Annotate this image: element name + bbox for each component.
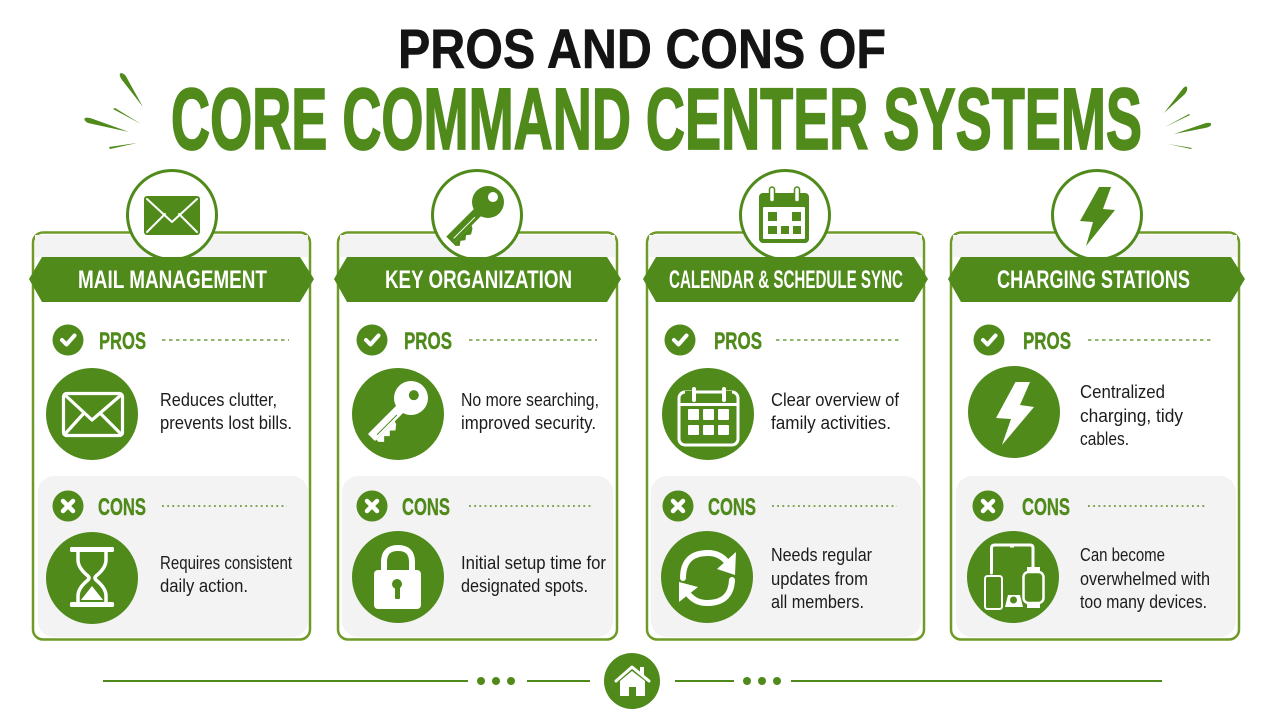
- icon: calendar: [662, 368, 754, 460]
- pros text: [771, 390, 900, 433]
- cons text: Can become: [1080, 545, 1165, 565]
- cons text: updates from: [771, 569, 868, 589]
- footer divider: [103, 677, 1162, 685]
- card frame: [33, 232, 310, 640]
- cons text: Requires consistent: [160, 553, 292, 573]
- cons text: designated spots.: [461, 576, 588, 596]
- cons header: CONS: [98, 494, 146, 521]
- pros header: PROS: [404, 328, 452, 355]
- pros text: Clear overview of: [771, 390, 900, 410]
- cons text: overwhelmed with: [1080, 569, 1210, 589]
- pros header: [52, 324, 289, 356]
- cons header: [662, 490, 897, 522]
- heading banner: CALENDAR & SCHEDULE SYNC: [669, 266, 903, 294]
- pros header: PROS: [714, 328, 762, 355]
- panel: calendar and schedule sync: [643, 170, 928, 640]
- pros text: improved security.: [461, 413, 596, 433]
- panel: key organization: [334, 170, 621, 640]
- icon: right sparkle rays: [1164, 86, 1211, 149]
- pros header: PROS: [99, 328, 146, 355]
- cons header: [52, 490, 287, 522]
- cons background: [342, 476, 613, 637]
- pros text: prevents lost bills.: [160, 413, 292, 433]
- card frame: [338, 232, 617, 640]
- header badge icon: lightning bolt: [1052, 170, 1142, 260]
- icon: key: [352, 368, 444, 460]
- icon: envelope outline: [46, 368, 138, 460]
- header badge icon: calendar: [740, 170, 830, 260]
- icon: hourglass: [46, 532, 138, 624]
- heading banner: [29, 257, 314, 302]
- pros text: Reduces clutter,: [160, 390, 277, 410]
- cons header: CONS: [708, 494, 756, 521]
- icon: lightning bolt: [968, 366, 1060, 458]
- header badge icon: key: [432, 170, 522, 260]
- cons background: [38, 476, 308, 637]
- cons text: [771, 545, 872, 612]
- pros header: [974, 324, 1214, 356]
- pros header: [664, 324, 902, 356]
- cons text: Initial setup time for: [461, 553, 606, 573]
- cons background: [651, 476, 921, 637]
- heading banner: [334, 257, 621, 302]
- icon: home: [604, 653, 660, 709]
- icon: devices: [967, 531, 1059, 623]
- pros text: cables.: [1080, 429, 1129, 449]
- pros text: [1080, 382, 1183, 449]
- panel: mail management: [29, 170, 314, 640]
- panel: charging stations: [948, 170, 1245, 640]
- icon: sync arrows: [661, 531, 753, 623]
- header badge icon: envelope: [128, 170, 216, 260]
- cons text: all members.: [771, 592, 864, 612]
- title line 1: PROS AND CONS OF: [398, 17, 886, 80]
- cons text: [461, 553, 606, 596]
- cons header: [972, 490, 1206, 522]
- pros text: Centralized: [1080, 382, 1165, 402]
- pros text: family activities.: [771, 413, 891, 433]
- heading banner: MAIL MANAGEMENT: [78, 266, 267, 294]
- cons text: Needs regular: [771, 545, 872, 565]
- pros text: [461, 390, 599, 433]
- pros text: [160, 390, 292, 433]
- pros header: [356, 324, 597, 356]
- cons header: CONS: [1022, 494, 1070, 521]
- card frame: [647, 232, 924, 640]
- heading banner: CHARGING STATIONS: [997, 266, 1190, 294]
- cons text: daily action.: [160, 576, 248, 596]
- pros text: charging, tidy: [1080, 406, 1183, 426]
- cons text: too many devices.: [1080, 592, 1207, 612]
- heading banner: [643, 257, 928, 302]
- heading banner: [948, 257, 1245, 302]
- cons header: [356, 490, 592, 522]
- icon: padlock: [352, 531, 444, 623]
- icon: left sparkle rays: [84, 73, 143, 149]
- cons text: [160, 553, 292, 596]
- pros text: No more searching,: [461, 390, 599, 410]
- cons header: CONS: [402, 494, 450, 521]
- card frame: [951, 232, 1239, 640]
- heading banner: KEY ORGANIZATION: [385, 266, 572, 294]
- pros header: PROS: [1023, 328, 1071, 355]
- cons text: [1080, 545, 1210, 612]
- cons background: [956, 476, 1236, 637]
